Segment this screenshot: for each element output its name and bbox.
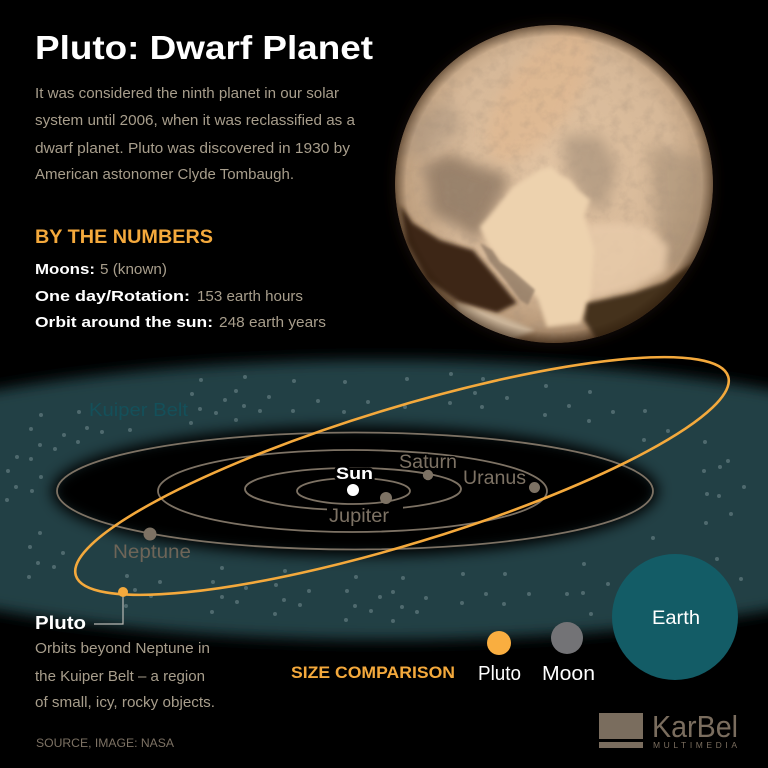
- Pluto callout: [35, 613, 215, 711]
- Neptune: [113, 528, 191, 563]
- Earth size circle: [612, 554, 738, 680]
- Pluto callout: Orbits beyond Neptune in: [35, 640, 210, 657]
- Saturn: Saturn: [399, 452, 457, 473]
- size comparison labels: Pluto: [478, 663, 521, 685]
- Sun: Sun: [336, 464, 373, 483]
- Neptune: Neptune: [113, 542, 191, 563]
- intro text: [35, 85, 356, 183]
- Uranus: Uranus: [463, 468, 526, 489]
- title: Pluto: Dwarf Planet: [35, 29, 373, 66]
- label gap in Saturn orbit: [327, 506, 403, 526]
- Earth size circle: Earth: [652, 608, 700, 629]
- by the numbers facts: Moons:: [35, 261, 95, 278]
- Uranus: [463, 468, 540, 493]
- Pluto callout: Pluto: [35, 613, 86, 633]
- Pluto callout: of small, icy, rocky objects.: [35, 694, 215, 711]
- Pluto callout: the Kuiper Belt – a region: [35, 668, 205, 685]
- intro text: It was considered the ninth planet in our solar: [35, 85, 339, 102]
- by the numbers facts: [35, 261, 326, 331]
- size comparison labels: Moon: [542, 663, 595, 685]
- by the numbers facts: 248 earth years: [219, 314, 326, 331]
- Moon size circle: [551, 622, 583, 654]
- by the numbers facts: 5 (known): [100, 261, 167, 278]
- planetary orbits: [57, 432, 653, 550]
- Kuiper Belt objects (dots): [7, 374, 744, 621]
- Kuiper Belt label: Kuiper Belt: [89, 400, 188, 420]
- Pluto marker and leader line: [94, 587, 128, 624]
- Jupiter: [329, 492, 392, 527]
- by the numbers heading: BY THE NUMBERS: [35, 227, 213, 248]
- Pluto size circle: [487, 631, 511, 655]
- KarBel Multimedia logo: MULTIMEDIA: [653, 740, 737, 750]
- KarBel Multimedia logo: [599, 709, 738, 750]
- intro text: system until 2006, when it was reclassified as a: [35, 112, 356, 129]
- intro text: dwarf planet. Pluto was discovered in 1930 by: [35, 140, 351, 157]
- inner solar system dark disc: [52, 426, 658, 556]
- Pluto orbit: [56, 311, 748, 641]
- by the numbers facts: 153 earth hours: [197, 288, 303, 305]
- Jupiter: Jupiter: [329, 506, 390, 527]
- by the numbers facts: One day/Rotation:: [35, 288, 190, 305]
- Sun: [336, 464, 373, 496]
- photo: Pluto planet: [394, 12, 714, 345]
- intro text: American astonomer Clyde Tombaugh.: [35, 166, 294, 183]
- by the numbers facts: Orbit around the sun:: [35, 314, 213, 331]
- size comparison labels: SIZE COMPARISON: [291, 663, 455, 682]
- Kuiper Belt band: [0, 360, 768, 640]
- KarBel Multimedia logo: KarBel: [652, 709, 738, 744]
- source credit: SOURCE, IMAGE: NASA: [36, 736, 174, 750]
- size comparison labels: [291, 663, 595, 685]
